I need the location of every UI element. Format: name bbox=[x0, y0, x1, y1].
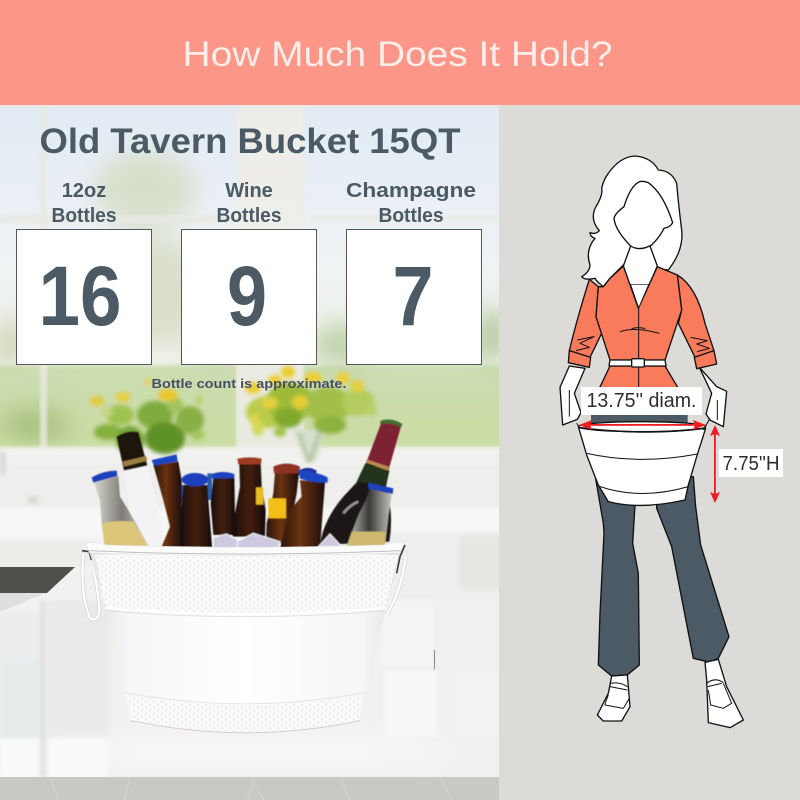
hands bbox=[560, 366, 585, 425]
panel: wine bottles count: 9 bbox=[227, 249, 267, 343]
panel: 12oz bottles count bbox=[16, 180, 152, 364]
arrow: bucket diameter bbox=[579, 420, 706, 430]
panel: size figure background bbox=[500, 105, 800, 800]
label: 13.75 inch diameter: 13.75'' diam. bbox=[586, 390, 696, 412]
panel: 12oz bottles count: Bottles bbox=[52, 205, 116, 227]
icon: left flowers bbox=[90, 378, 205, 454]
icon: wine bottle bbox=[320, 420, 402, 545]
label: 7.75 inch height: 7.75''H bbox=[722, 453, 780, 475]
arrow: bucket height bbox=[710, 425, 720, 503]
icon: tall brown bottle bbox=[233, 457, 266, 537]
icon: brown bottle left bbox=[152, 454, 182, 548]
window sill and counter back bbox=[0, 444, 499, 590]
panel: 12oz bottles count: 16 bbox=[38, 249, 122, 343]
panel: champagne bottles count: Champagne bbox=[346, 180, 476, 202]
bucket drawing bbox=[578, 427, 706, 505]
hammered band bottom bbox=[127, 695, 364, 733]
hammered band top bbox=[95, 555, 398, 615]
peplum bbox=[599, 366, 678, 388]
cuffs bbox=[568, 351, 591, 367]
hair bbox=[582, 156, 682, 287]
panel: champagne bottles count: 7 bbox=[392, 249, 434, 343]
panel: kitchen photo background bbox=[0, 100, 505, 800]
icon: ice cubes bbox=[213, 533, 342, 548]
icon: brown bottle with label bbox=[266, 464, 300, 543]
heading: Old Tavern Bucket 15QT: Old Tavern Bucket 15QT bbox=[40, 122, 460, 161]
left sleeve bbox=[569, 279, 602, 357]
icon: brown bottle small bbox=[211, 472, 235, 535]
marble counter bbox=[0, 593, 437, 776]
header banner bbox=[0, 0, 800, 105]
neck and chest bbox=[623, 246, 657, 310]
panel: champagne bottles count bbox=[346, 180, 482, 364]
icon: centre brown bottle bbox=[180, 473, 212, 548]
panel: wine bottles count: Bottles bbox=[216, 205, 282, 227]
face bbox=[614, 181, 673, 249]
left foot bbox=[597, 675, 630, 721]
icon: front blue-cap brown bottle bbox=[280, 468, 328, 548]
right foot bbox=[705, 659, 743, 728]
icon: clear bottle right bbox=[347, 483, 393, 547]
panel: 12oz bottles count: 12oz bbox=[62, 180, 106, 202]
illustration: bucket of bottles bbox=[82, 420, 406, 733]
icon: bottle colour behind bbox=[176, 473, 212, 502]
icon: right flowers and vase bbox=[245, 366, 377, 462]
note: bottle count is approximate: Bottle count is approximate. bbox=[152, 376, 346, 391]
panel: wine bottles count bbox=[182, 180, 316, 364]
panel: champagne bottles count: Bottles bbox=[378, 205, 444, 227]
icon: bucket handles bbox=[82, 545, 406, 619]
icon: white bottle bbox=[117, 432, 163, 548]
right leg bbox=[657, 477, 729, 662]
right sleeve bbox=[677, 275, 714, 357]
dark sink bbox=[0, 567, 75, 593]
shirt body bbox=[596, 266, 682, 360]
left leg bbox=[595, 475, 639, 676]
icon: bucket body bbox=[86, 542, 404, 733]
rim bbox=[86, 542, 404, 555]
belt bbox=[609, 360, 666, 366]
icon: clear beer bottle bbox=[92, 471, 150, 548]
pants top bbox=[591, 415, 688, 423]
illustration: woman holding bucket bbox=[560, 156, 743, 728]
panel: wine bottles count: Wine bbox=[225, 180, 273, 202]
title: How Much Does It Hold?: How Much Does It Hold? bbox=[182, 35, 612, 74]
